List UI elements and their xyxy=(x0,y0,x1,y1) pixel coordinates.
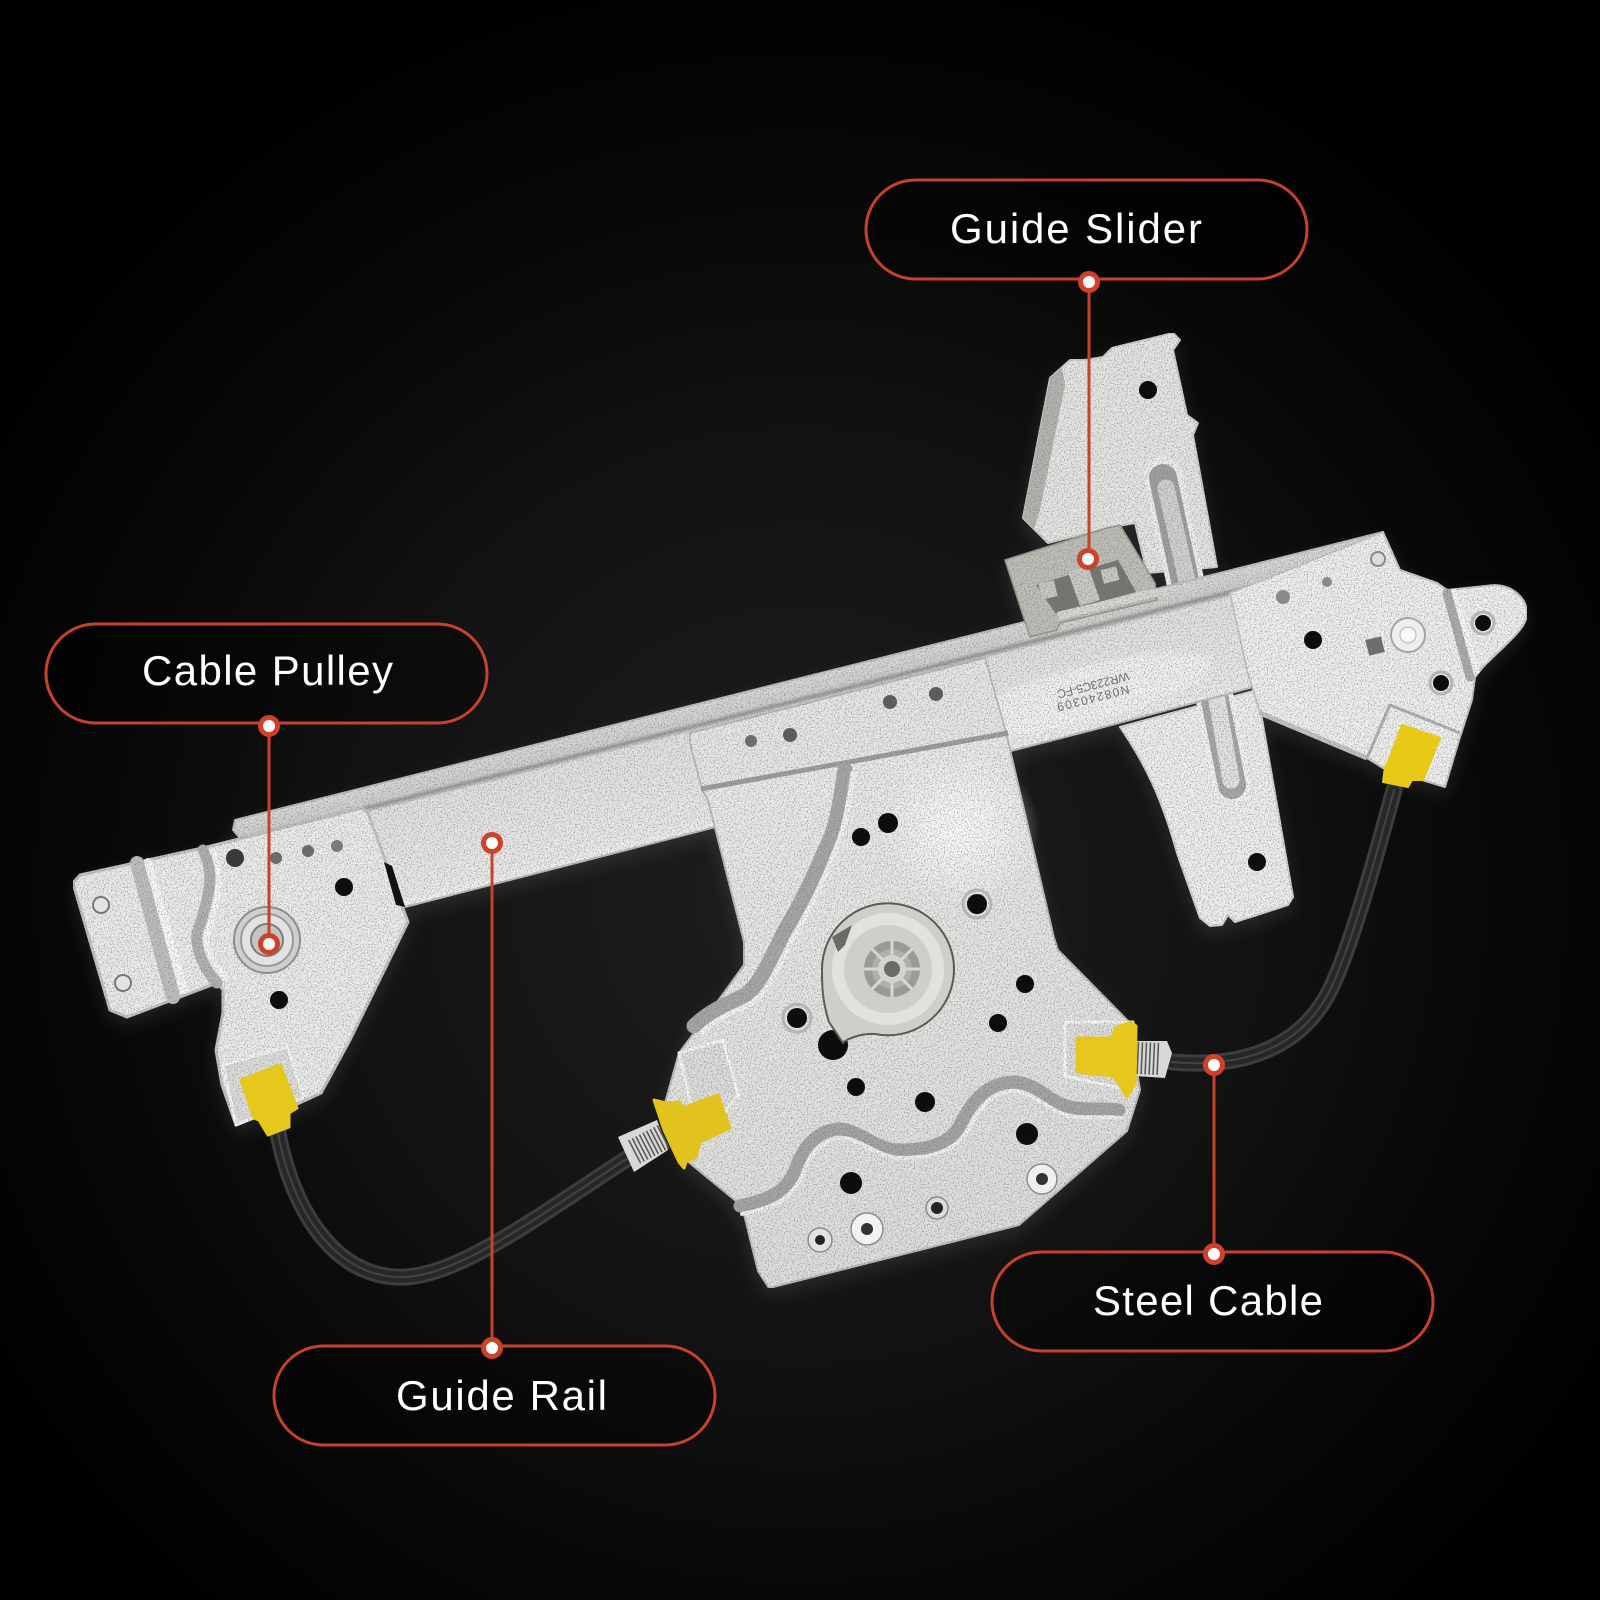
gap behind left bracket xyxy=(384,862,405,907)
yellow housing left upper xyxy=(241,1065,297,1135)
anchor dot bottom xyxy=(484,1340,500,1356)
rail stamped text: N08240309 xyxy=(1055,682,1131,714)
leader line xyxy=(490,843,494,1348)
holes and rivets xyxy=(93,381,1494,1252)
guide rail xyxy=(233,532,1395,907)
rivets xyxy=(93,552,1385,1252)
product: window regulator xyxy=(73,333,1527,1288)
callout: Steel Cable xyxy=(992,1056,1433,1351)
pulley xyxy=(234,907,300,973)
anchor dot top xyxy=(1206,1056,1222,1074)
pill xyxy=(866,180,1307,279)
leader line xyxy=(1088,282,1090,559)
pill xyxy=(46,624,487,723)
label: Steel Cable xyxy=(1093,1277,1323,1324)
callout: Guide Rail xyxy=(274,834,715,1445)
metal body xyxy=(73,333,1527,1288)
label: Guide Slider xyxy=(950,205,1202,252)
left bracket xyxy=(73,808,408,1125)
rail stamped text: WR223C5-FC xyxy=(1055,669,1131,701)
right bracket xyxy=(1230,532,1527,787)
anchor dot bottom xyxy=(1080,550,1096,568)
callout: Cable Pulley xyxy=(46,624,487,952)
anchor dot top xyxy=(484,834,500,852)
leader line xyxy=(1212,1065,1216,1254)
spool xyxy=(822,903,954,1043)
pill xyxy=(274,1346,715,1445)
yellow housing right lower xyxy=(1077,1022,1136,1097)
spool hub xyxy=(864,941,920,997)
left cable xyxy=(278,1133,628,1277)
slider plate lower section xyxy=(1120,690,1293,926)
guide slider clip xyxy=(1005,525,1159,637)
pill xyxy=(992,1252,1433,1351)
callout: Guide Slider xyxy=(866,180,1307,568)
cable spring right xyxy=(1135,1041,1172,1078)
anchor dot top xyxy=(1080,274,1098,290)
large hole under spool xyxy=(818,1030,848,1060)
yellow housing left lower xyxy=(654,1095,730,1168)
label: Cable Pulley xyxy=(142,647,393,694)
label: Guide Rail xyxy=(396,1372,607,1419)
slider plate upper section xyxy=(1023,333,1217,585)
anchor dot top xyxy=(260,718,278,734)
anchor dot bottom xyxy=(1206,1246,1222,1262)
cables xyxy=(278,790,1394,1277)
yellow housing right upper xyxy=(1383,725,1440,787)
pivot xyxy=(1365,618,1425,656)
leader line xyxy=(268,726,270,944)
right cable xyxy=(1172,790,1394,1063)
centre mounting plate xyxy=(665,658,1140,1288)
anchor dot bottom xyxy=(260,936,278,952)
cable spring left xyxy=(618,1120,668,1172)
